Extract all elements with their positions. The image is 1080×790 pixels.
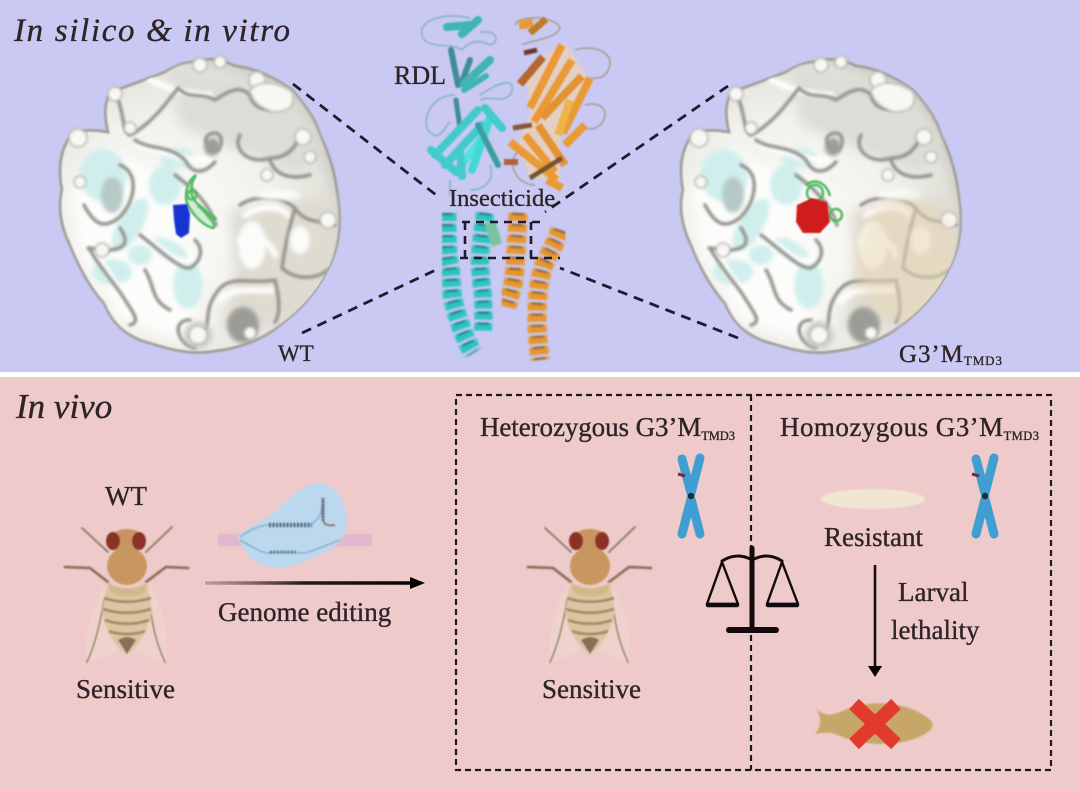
label: Larval lethality [891, 577, 980, 645]
heading: Homozygous G3'M TMD3: TMD3 [1004, 429, 1039, 443]
label: RDL: RDL [394, 61, 446, 90]
icon: WT fruit fly [65, 527, 188, 662]
icon: resistant larva [821, 489, 925, 509]
label: WT fly: WT [105, 481, 147, 511]
inner dashed box over helices [460, 222, 560, 258]
cyan extracellular loops [422, 16, 512, 195]
heading: Homozygous G3'M TMD3: Homozygous G3’M [780, 412, 1003, 442]
label: Insecticide: Insecticide [449, 185, 555, 212]
label: Larval lethality: lethality [891, 615, 980, 645]
heading: Heterozygous G3'M TMD3: TMD3 [701, 429, 735, 443]
dashed zoom lines [293, 84, 738, 338]
panel: in vivo background [0, 377, 1080, 790]
title: In vivo: In vivo [15, 387, 112, 426]
icon: balance scale [707, 548, 798, 630]
molecular surface: G3'M TMD3 [681, 56, 961, 353]
icon: dead larva with red cross [815, 703, 932, 744]
cyan transmembrane helices [447, 213, 497, 353]
cyan beta strands [431, 20, 502, 176]
protein structure: RDL [422, 16, 610, 360]
icon: heterozygous fruit fly [528, 527, 651, 662]
icon: chromosome heterozygous [678, 458, 700, 534]
label: Resistant: Resistant [824, 522, 923, 552]
icon: chromosome homozygous [972, 458, 994, 534]
label: Genome editing: Genome editing [218, 597, 391, 627]
ligand: red insecticide [796, 198, 830, 233]
label: Larval lethality: Larval [898, 577, 968, 607]
tint: beige subunit region [856, 198, 956, 322]
label: Sensitive (heterozygous): Sensitive [542, 674, 641, 704]
orange extracellular loops [513, 18, 610, 185]
ligand: green binding site [806, 182, 842, 221]
ligand: green binding site [186, 175, 216, 228]
label: G3'M TMD3 surface: G3’M [899, 341, 963, 368]
icon: CRISPR Cas9 complex [218, 483, 372, 568]
arrow: genome editing [205, 577, 425, 589]
heading: Heterozygous G3'M TMD3: Heterozygous G3’M [480, 412, 701, 442]
arrow: larval lethality [868, 565, 882, 677]
label: G3'M TMD3 surface: TMD3 [964, 353, 1002, 368]
ligand: blue insecticide [173, 204, 190, 238]
title: In silico & in vitro: In silico & in vitro [13, 13, 290, 49]
molecular surface: WT [60, 56, 340, 353]
label: WT surface: WT [278, 341, 314, 366]
orange beta strands [518, 42, 590, 180]
dashed box: heterozygous and homozygous [456, 395, 1051, 770]
orange transmembrane helices [507, 213, 560, 360]
label: Sensitive (WT): Sensitive [76, 674, 175, 704]
panel: in silico and in vitro background [0, 0, 1080, 372]
